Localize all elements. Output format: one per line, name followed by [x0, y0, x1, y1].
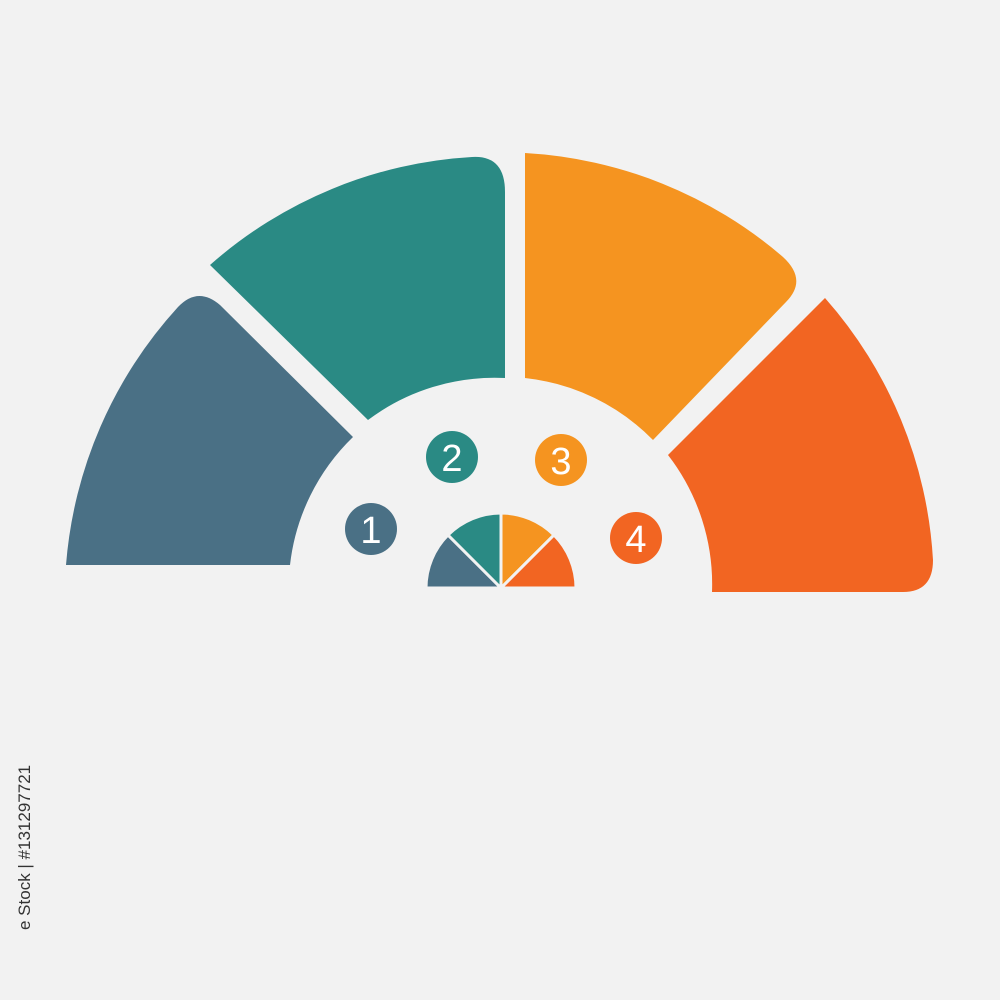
- badge 3: 3: [550, 441, 572, 483]
- segment 4 red: [668, 298, 933, 592]
- badge 4: [610, 512, 662, 564]
- badge 3: [535, 434, 587, 486]
- mini pie: [426, 513, 576, 588]
- badge 1: 1: [360, 510, 382, 552]
- segment 2 teal: [210, 157, 505, 420]
- badge 2: 2: [441, 438, 463, 480]
- badge 2: [426, 431, 478, 483]
- segment 3 orange: [525, 153, 796, 440]
- segment 1 blue: [66, 296, 353, 565]
- badge 4: 4: [625, 519, 647, 561]
- watermark id text: e Stock | #131297721: [15, 765, 34, 930]
- badge 1: [345, 503, 397, 555]
